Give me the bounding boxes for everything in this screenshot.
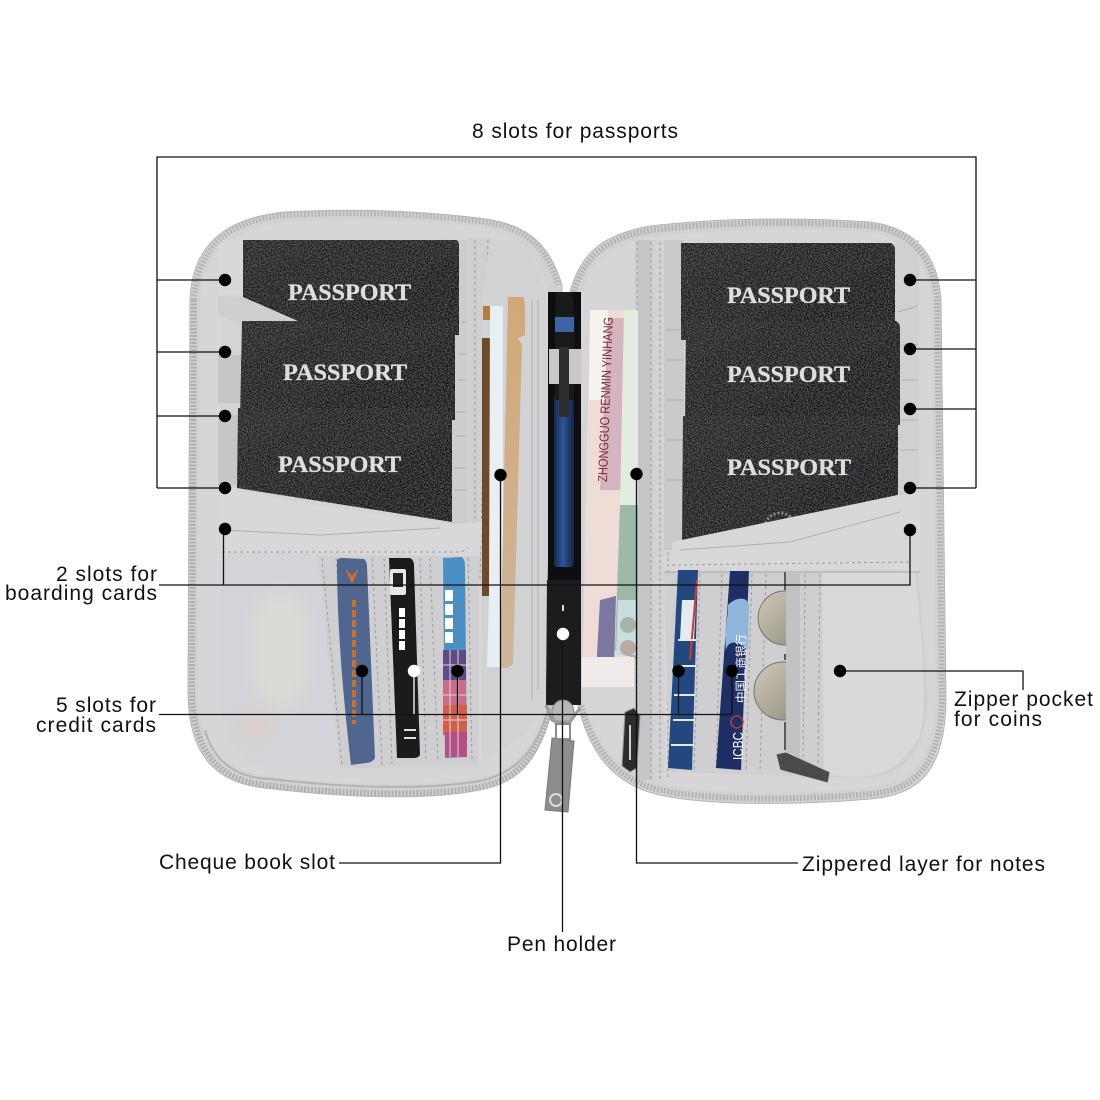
callout: 2 slots for boarding cards — [5, 523, 916, 605]
bottom zipper seam left — [205, 710, 548, 787]
callout: zipper pocket for coins: for coins — [954, 708, 1042, 731]
passport left 2 — [240, 321, 455, 420]
card: blue — [337, 558, 375, 765]
callout: 5 slots for credit cards: 5 slots for — [56, 694, 156, 717]
metal pull tab — [545, 738, 574, 812]
right panel of wallet — [570, 219, 946, 803]
callout: 5 slots for credit cards — [36, 665, 738, 737]
passport right 3 — [682, 416, 898, 543]
left passport slot folds — [218, 240, 476, 580]
right boarding card flap — [672, 493, 920, 570]
strap between passports and cheque slot — [466, 238, 490, 583]
callout: pen holder — [507, 628, 616, 956]
brown cheque strip — [482, 338, 492, 596]
main zipper slider and pull — [545, 700, 580, 812]
card: multicolour — [443, 557, 467, 758]
white and pink note — [582, 310, 638, 687]
callout: zipper pocket for coins: Zipper pocket — [954, 688, 1093, 711]
boarding card pocket flap — [220, 486, 482, 556]
note layer zipper pull — [622, 708, 640, 772]
card: black — [389, 558, 420, 758]
card slot strips — [318, 556, 478, 768]
note text: ZHONGGUO RENMIN YINHANG — [595, 317, 616, 482]
callout: cheque book slot — [159, 469, 507, 874]
left panel of wallet — [188, 210, 562, 797]
card: blue city — [668, 570, 698, 770]
callout: pen holder: Pen holder — [507, 933, 616, 956]
callout: cheque book slot: Cheque book slot — [159, 851, 335, 874]
callout: zippered layer for notes: Zippered layer for notes — [802, 853, 1045, 876]
pen holder — [546, 292, 581, 705]
right panel zipper edge — [570, 219, 946, 803]
elastic black pen sleeve — [546, 292, 581, 705]
card: ICBC: 中国工商银行 — [734, 634, 748, 703]
cheque book contents — [482, 297, 525, 668]
card: ICBC — [716, 571, 749, 770]
callout: 8 slots for passports: 8 slots for passports — [472, 120, 678, 143]
pen top — [555, 292, 575, 400]
coins — [754, 590, 786, 720]
passport right 3: PASSPORT — [727, 455, 851, 480]
pink note print — [600, 318, 632, 490]
green note — [615, 505, 638, 660]
passport right 1: PASSPORT — [727, 283, 850, 308]
lining right of cheque slot — [482, 240, 546, 760]
callout: 5 slots for credit cards: credit cards — [36, 714, 156, 737]
callout: 2 slots for boarding cards: boarding cards — [5, 582, 157, 605]
white cheque sheet — [487, 306, 503, 667]
tan cheque sheet — [500, 297, 525, 668]
passport right 1 — [681, 243, 895, 340]
right passport slot strip — [664, 240, 684, 550]
passport left 1: PASSPORT — [288, 280, 411, 305]
callout: 8 slots for passports — [157, 120, 976, 494]
card: ICBC: ICBC — [730, 732, 747, 760]
passport left 2: PASSPORT — [283, 360, 407, 385]
right pocket with zipper — [664, 572, 928, 778]
right zipper teeth — [574, 223, 942, 798]
callout: 2 slots for boarding cards: 2 slots for — [56, 563, 157, 586]
elastic loop — [549, 349, 581, 384]
pen clip — [559, 347, 569, 417]
left panel inner pocket area — [220, 238, 480, 770]
left panel zipper edge — [188, 210, 562, 797]
banknotes — [582, 310, 638, 687]
passport right 2: PASSPORT — [727, 362, 850, 387]
coin pocket zipper — [776, 572, 830, 783]
right panel lining — [582, 230, 936, 792]
left zipper teeth — [192, 300, 551, 793]
clear window pocket — [224, 556, 335, 764]
passport left 1 — [243, 240, 459, 335]
callout: zipper pocket for coins — [834, 665, 1093, 731]
passport left 3: PASSPORT — [278, 452, 401, 477]
passport right 2 — [685, 321, 900, 425]
coin zipper pull — [776, 752, 830, 783]
zipper flap for notes layer — [634, 240, 668, 785]
passport left 3 — [237, 408, 452, 522]
pen body — [554, 395, 574, 567]
callout: zippered layer for notes — [630, 468, 1045, 876]
left panel lining — [198, 220, 548, 784]
